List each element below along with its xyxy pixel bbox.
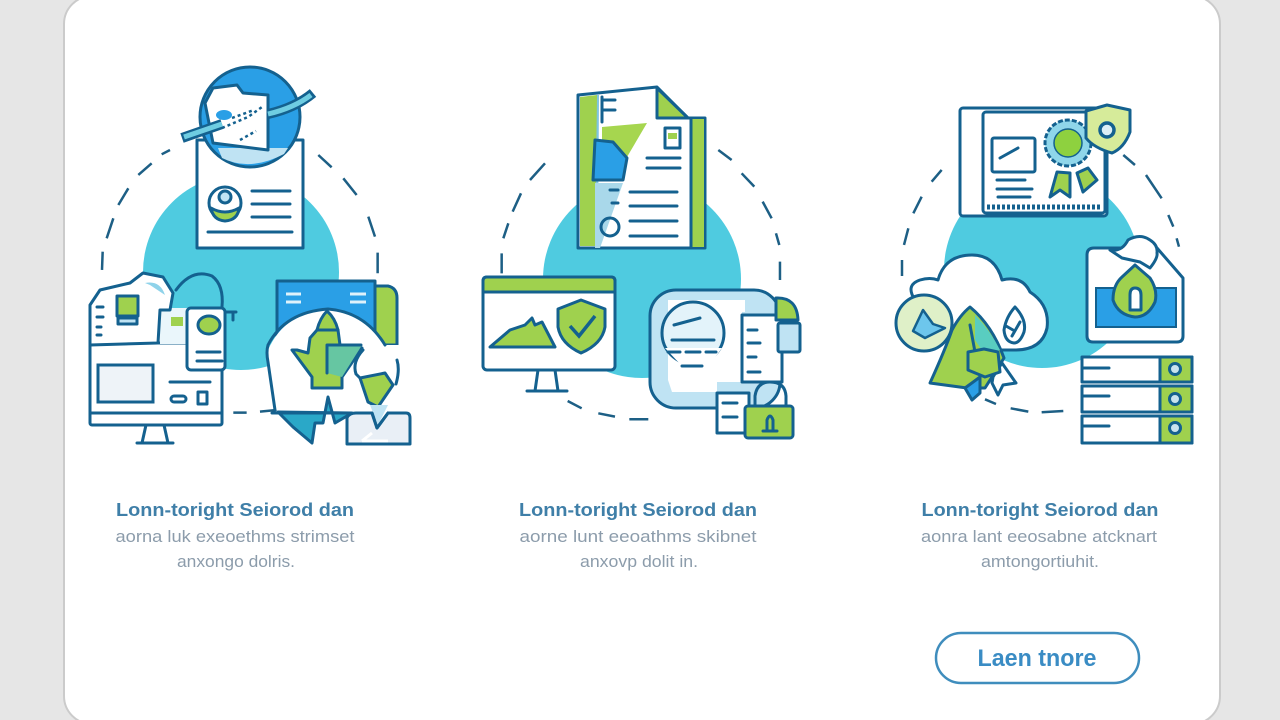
panel: left illustration	[90, 67, 420, 444]
button: learn more	[936, 633, 1139, 683]
panel: center illustration	[483, 87, 800, 438]
icon: person with rocket	[267, 281, 420, 444]
teal circle	[143, 174, 339, 370]
icon: globe with map	[182, 67, 313, 167]
text block: right: Lonn-toright Seiorod dan	[922, 500, 1158, 520]
text block: left: aorna luk exeoethms strimset	[116, 527, 355, 546]
text block: center: Lonn-toright Seiorod dan	[519, 500, 757, 520]
teal circle	[944, 172, 1140, 368]
icon: certificate	[960, 105, 1130, 216]
icon: desktop computer	[90, 273, 236, 443]
icon: server stack	[1082, 357, 1192, 443]
text block: center: anxovp dolit in.	[580, 552, 698, 571]
icon: monitor with shield	[483, 277, 615, 391]
button: learn more: Laen tnore	[978, 645, 1096, 672]
icon: report document	[578, 87, 705, 248]
dashed ring	[502, 150, 780, 419]
text block: left	[116, 500, 355, 571]
icon: security device	[650, 290, 800, 438]
text block: left: anxongo dolris.	[177, 552, 295, 571]
text block: right	[921, 500, 1158, 571]
text block: center	[519, 500, 757, 571]
text block: left: Lonn-toright Seiorod dan	[116, 500, 354, 520]
panel: right illustration	[896, 105, 1192, 443]
text block: right: aonra lant eeosabne atcknart	[921, 527, 1157, 546]
icon: cloud with tree	[896, 255, 1047, 400]
dashed ring	[102, 150, 378, 413]
teal circle	[543, 180, 741, 378]
icon: document	[197, 140, 303, 248]
text block: right: amtongortiuhit.	[981, 552, 1099, 571]
dashed ring	[902, 155, 1179, 412]
icon: tag with cloud	[1087, 236, 1183, 342]
text block: center: aorne lunt eeoathms skibnet	[520, 527, 757, 546]
